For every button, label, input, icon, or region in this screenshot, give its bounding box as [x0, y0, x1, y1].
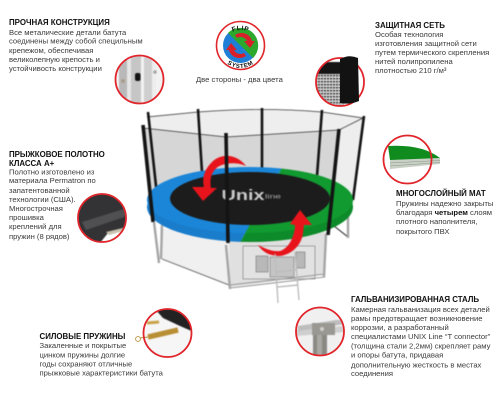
section: jumping surface text: Многострочная	[9, 204, 63, 213]
section: sturdy construction text: крепежом, обеспечивая	[9, 46, 93, 55]
jumping mat	[170, 172, 330, 225]
section: galvanized steel text: рамы предотвращает возникновение	[351, 314, 482, 323]
section: sturdy construction text: ПРОЧНАЯ КОНСТРУКЦИЯ	[9, 18, 110, 27]
icon: flip system badge: FLIP	[232, 26, 249, 32]
section: jumping surface text: материала Permatron по	[9, 176, 96, 185]
back net	[148, 110, 363, 205]
section: power springs text: годы сохраняют отличные	[40, 360, 132, 368]
section: safety net text	[375, 21, 489, 75]
caption: two sides two colours: Две стороны - два цвета	[196, 75, 284, 84]
section: power springs text: СИЛОВЫЕ ПРУЖИНЫ	[40, 332, 126, 341]
section: safety net text: плотностью 210 г/м³	[375, 66, 447, 75]
section: jumping surface text: пружин (8 рядов)	[9, 232, 70, 241]
section: galvanized steel text	[351, 295, 491, 378]
section: galvanized steel text: (толщина стали 2,2мм) скрепляет раму	[351, 342, 491, 350]
section: galvanized steel text: дополнительную жесткость в местах	[351, 360, 482, 370]
section: safety net text: путем термического скрепления	[375, 48, 489, 57]
section: multilayer mat text: плотного наполнителя,	[396, 217, 477, 226]
section: power springs text: прыжковые характеристики батута	[40, 368, 164, 378]
section: multilayer mat text: Пружины надежно закрыты	[396, 199, 493, 208]
icon: spring detail	[136, 309, 194, 357]
section: multilayer mat text	[396, 189, 493, 236]
skirt and lower frame	[160, 226, 348, 288]
section: jumping surface text: креплений для	[9, 222, 62, 231]
section: safety net text: Особая технология	[375, 30, 443, 39]
section: safety net text: нитей полипропилена	[375, 57, 453, 66]
top rails	[143, 110, 363, 137]
ladder	[275, 252, 299, 303]
section: power springs text: Закаленные и покрытые	[40, 341, 126, 350]
section: galvanized steel text: специалистами UNIX Line “T connector”	[351, 332, 491, 341]
section: jumping surface text	[9, 150, 105, 241]
section: safety net text: ЗАЩИТНАЯ СЕТЬ	[375, 21, 445, 30]
section: safety net text: изготовления защитной сети	[375, 39, 477, 48]
brand logo on mat: line	[265, 194, 282, 200]
icon: net detail	[316, 56, 364, 108]
section: galvanized steel text: и опоры батута, придавая	[351, 350, 443, 360]
section: jumping surface text: ПРЫЖКОВОЕ ПОЛОТНО	[9, 150, 105, 159]
section: sturdy construction text	[9, 18, 143, 73]
section: sturdy construction text: великолепную крепость и	[9, 55, 100, 64]
section: galvanized steel text: ГАЛЬВАНИЗИРОВАННАЯ СТАЛЬ	[351, 295, 479, 304]
section: power springs text	[40, 332, 164, 378]
section: sturdy construction text: Все металические детали батута	[9, 28, 127, 37]
section: galvanized steel text: Камерная гальванизация всех деталей	[351, 305, 490, 314]
icon: fabric stitching detail	[77, 193, 127, 243]
section: jumping surface text: технологии (США).	[9, 195, 76, 204]
pad	[147, 167, 353, 242]
section: sturdy construction text: соединены между собой специльным	[9, 36, 143, 46]
section: multilayer mat text: покрытого ПВХ	[396, 227, 449, 236]
section: jumping surface text: прошивка	[9, 213, 45, 222]
icon: layered mat detail	[384, 136, 440, 184]
section: galvanized steel text: соединения	[351, 369, 393, 378]
section: jumping surface text: КЛАССА А+	[9, 159, 55, 168]
front net	[143, 128, 339, 215]
icon: T connector detail	[296, 307, 345, 357]
section: power springs text: цинком пружины долгие	[40, 350, 125, 360]
section: sturdy construction text: устойчивость конструкции	[9, 64, 102, 73]
legs	[154, 214, 348, 289]
section: jumping surface text: запатентованной	[9, 186, 70, 195]
front poles	[143, 125, 339, 243]
icon: frame joint detail	[115, 55, 165, 105]
arrow: top flip arrow	[192, 156, 246, 201]
brand logo on mat	[222, 187, 282, 204]
section: galvanized steel text: коррозии, а разработанный	[351, 323, 449, 332]
trampoline illustration	[143, 108, 364, 303]
back poles	[148, 108, 364, 200]
icon: flip system badge	[216, 20, 266, 70]
arrow: bottom flip arrow	[258, 210, 312, 256]
section: multilayer mat text: благодаря четырем слоям	[396, 208, 492, 217]
section: jumping surface text: Полотно изготовлено из	[9, 168, 95, 176]
icon: flip system badge: SYSTEM	[228, 60, 253, 68]
brand logo on mat: Unix	[222, 187, 265, 204]
section: multilayer mat text: МНОГОСЛОЙНЫЙ МАТ	[396, 189, 486, 198]
